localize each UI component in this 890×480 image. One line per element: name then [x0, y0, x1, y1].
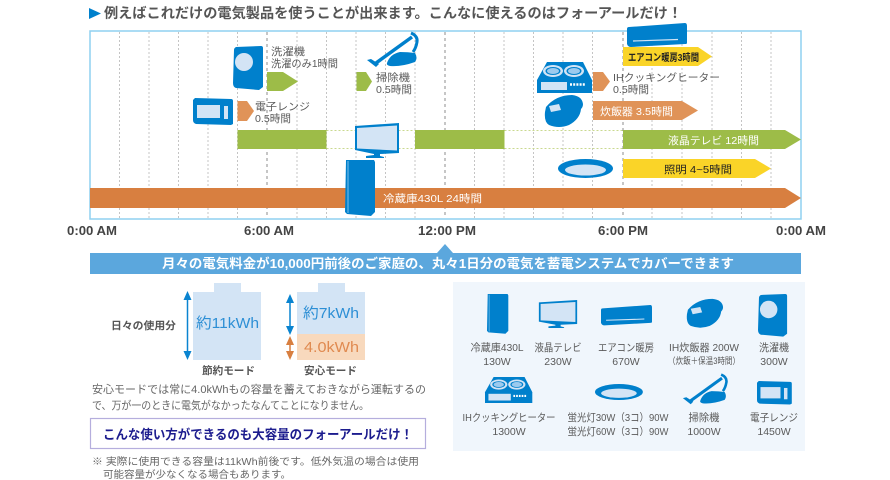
bar: vacuum 0.5 hours: 掃除機 [376, 71, 411, 84]
explanatory text: 安心モードでは常に4.0kWhもの容量を蓄えておきながら運転するの [92, 382, 426, 396]
icon: refrigerator [345, 160, 375, 216]
icon: IH heater [537, 62, 592, 93]
item: vacuum [683, 375, 726, 438]
battery: saving mode: 節約モード [202, 364, 255, 377]
item: washing machine: 洗濯機 [759, 341, 789, 354]
item: vacuum: 掃除機 [688, 411, 720, 424]
item: IH heater [462, 377, 556, 438]
label: daily use: 日々の使用分 [111, 319, 177, 332]
item: TV [534, 300, 582, 368]
time axis labels: 12:00 PM [418, 223, 476, 238]
callout [90, 418, 426, 448]
banner [90, 244, 801, 274]
footnote [92, 455, 419, 480]
time axis labels: 0:00 AM [776, 223, 826, 238]
title: 例えばこれだけの電気製品を使うことが出来ます。こんなに使えるのはフォーアールだけ！ [104, 5, 682, 21]
battery: saving mode: 約11kWh [196, 315, 259, 332]
item: rice cooker: （炊飯＋保温3時間） [668, 355, 740, 366]
icon: microwave [193, 98, 233, 125]
item: washing machine: 300W [760, 356, 788, 368]
battery: safety mode [286, 283, 365, 377]
bar: lighting 4-5 hours [623, 159, 771, 178]
battery: safety mode: 安心モード [304, 364, 357, 377]
item: refrigerator [470, 294, 524, 368]
bar: vacuum 0.5 hours: 0.5時間 [376, 84, 412, 96]
time axis labels [67, 223, 826, 238]
bar: refrigerator 24 hours [90, 188, 801, 208]
time axis labels: 6:00 PM [598, 223, 648, 238]
icon: washing machine [233, 46, 263, 90]
bar: IH cooking heater 0.5 hours: IHクッキングヒーター [613, 71, 720, 84]
item: microwave: 1450W [757, 426, 791, 438]
time axis labels: 6:00 AM [244, 223, 294, 238]
bar: microwave 0.5 hours [238, 101, 310, 125]
icon: ceiling light [558, 159, 613, 178]
item: IH heater: 1300W [492, 426, 526, 438]
bar: microwave 0.5 hours: 0.5時間 [255, 113, 291, 125]
bar: rice cooker 3.5 hours: 炊飯器 3.5時間 [600, 105, 673, 118]
icon: vacuum [367, 33, 417, 67]
chart frame [90, 31, 801, 219]
chart: appliance usage timeline [90, 23, 801, 219]
bar: washing machine 1 hour: 洗濯のみ1時間 [271, 58, 338, 70]
item: refrigerator: 冷蔵庫430L [470, 341, 524, 354]
item: air conditioner: エアコン暖房 [598, 341, 654, 354]
bar: IH cooking heater 0.5 hours [593, 71, 720, 96]
bar: LCD TV 12 hours: 液晶テレビ 12時間 [668, 135, 759, 147]
battery comparison [111, 283, 365, 377]
bar: air conditioner 3 hours: エアコン暖房3時間 [628, 51, 699, 64]
item: microwave [750, 381, 798, 438]
battery: safety mode: 4.0kWh [304, 339, 359, 356]
item: IH heater: IHクッキングヒーター [462, 411, 556, 424]
banner: 月々の電気料金が10,000円前後のご家庭の、丸々1日分の電気を蓄電システムでカバーできます [162, 256, 734, 271]
bar: rice cooker 3.5 hours [593, 101, 698, 120]
footnote: ※ 実際に使用できる容量は11kWh前後です。低外気温の場合は使用 [92, 455, 419, 468]
bar: vacuum 0.5 hours [356, 71, 412, 96]
explanatory text [92, 382, 426, 412]
bar: microwave 0.5 hours: 電子レンジ [255, 101, 310, 113]
icon: rice cooker [545, 95, 583, 127]
item: TV: 液晶テレビ [534, 342, 582, 354]
item: refrigerator: 130W [483, 356, 511, 368]
bar: LCD TV 12 hours [238, 130, 801, 149]
bar: lighting 4-5 hours: 照明 4~5時間 [664, 164, 732, 176]
item: microwave: 電子レンジ [750, 412, 798, 424]
item: fluorescent light: 蛍光灯60W（3コ）90W [568, 425, 669, 438]
item: washing machine [758, 294, 789, 368]
battery: saving mode [184, 283, 261, 377]
item: air conditioner [598, 305, 654, 368]
icon: air conditioner [627, 23, 687, 47]
item: rice cooker: IH炊飯器 200W [669, 341, 739, 354]
icon: TV [355, 123, 399, 158]
bar: washing machine 1 hour [267, 45, 338, 91]
item: air conditioner: 670W [612, 356, 640, 368]
time axis labels: 0:00 AM [67, 223, 117, 238]
callout: こんな使い方ができるのも大容量のフォーアールだけ！ [103, 427, 413, 442]
battery: safety mode: 約7kWh [303, 305, 359, 322]
item: TV: 230W [544, 356, 572, 368]
bar: IH cooking heater 0.5 hours: 0.5時間 [613, 84, 649, 96]
item: rice cooker [668, 299, 740, 366]
item: fluorescent light [568, 384, 669, 438]
bar: air conditioner 3 hours [623, 47, 712, 66]
item: vacuum: 1000W [687, 426, 721, 438]
explanatory text: で、万が一のときに電気がなかったなんてことになりません。 [92, 398, 369, 412]
bar: refrigerator 24 hours: 冷蔵庫430L 24時間 [383, 192, 482, 205]
item: fluorescent light: 蛍光灯30W（3コ）90W [568, 411, 669, 424]
panel: appliance wattages [453, 282, 805, 451]
bar: washing machine 1 hour: 洗濯機 [271, 45, 306, 58]
